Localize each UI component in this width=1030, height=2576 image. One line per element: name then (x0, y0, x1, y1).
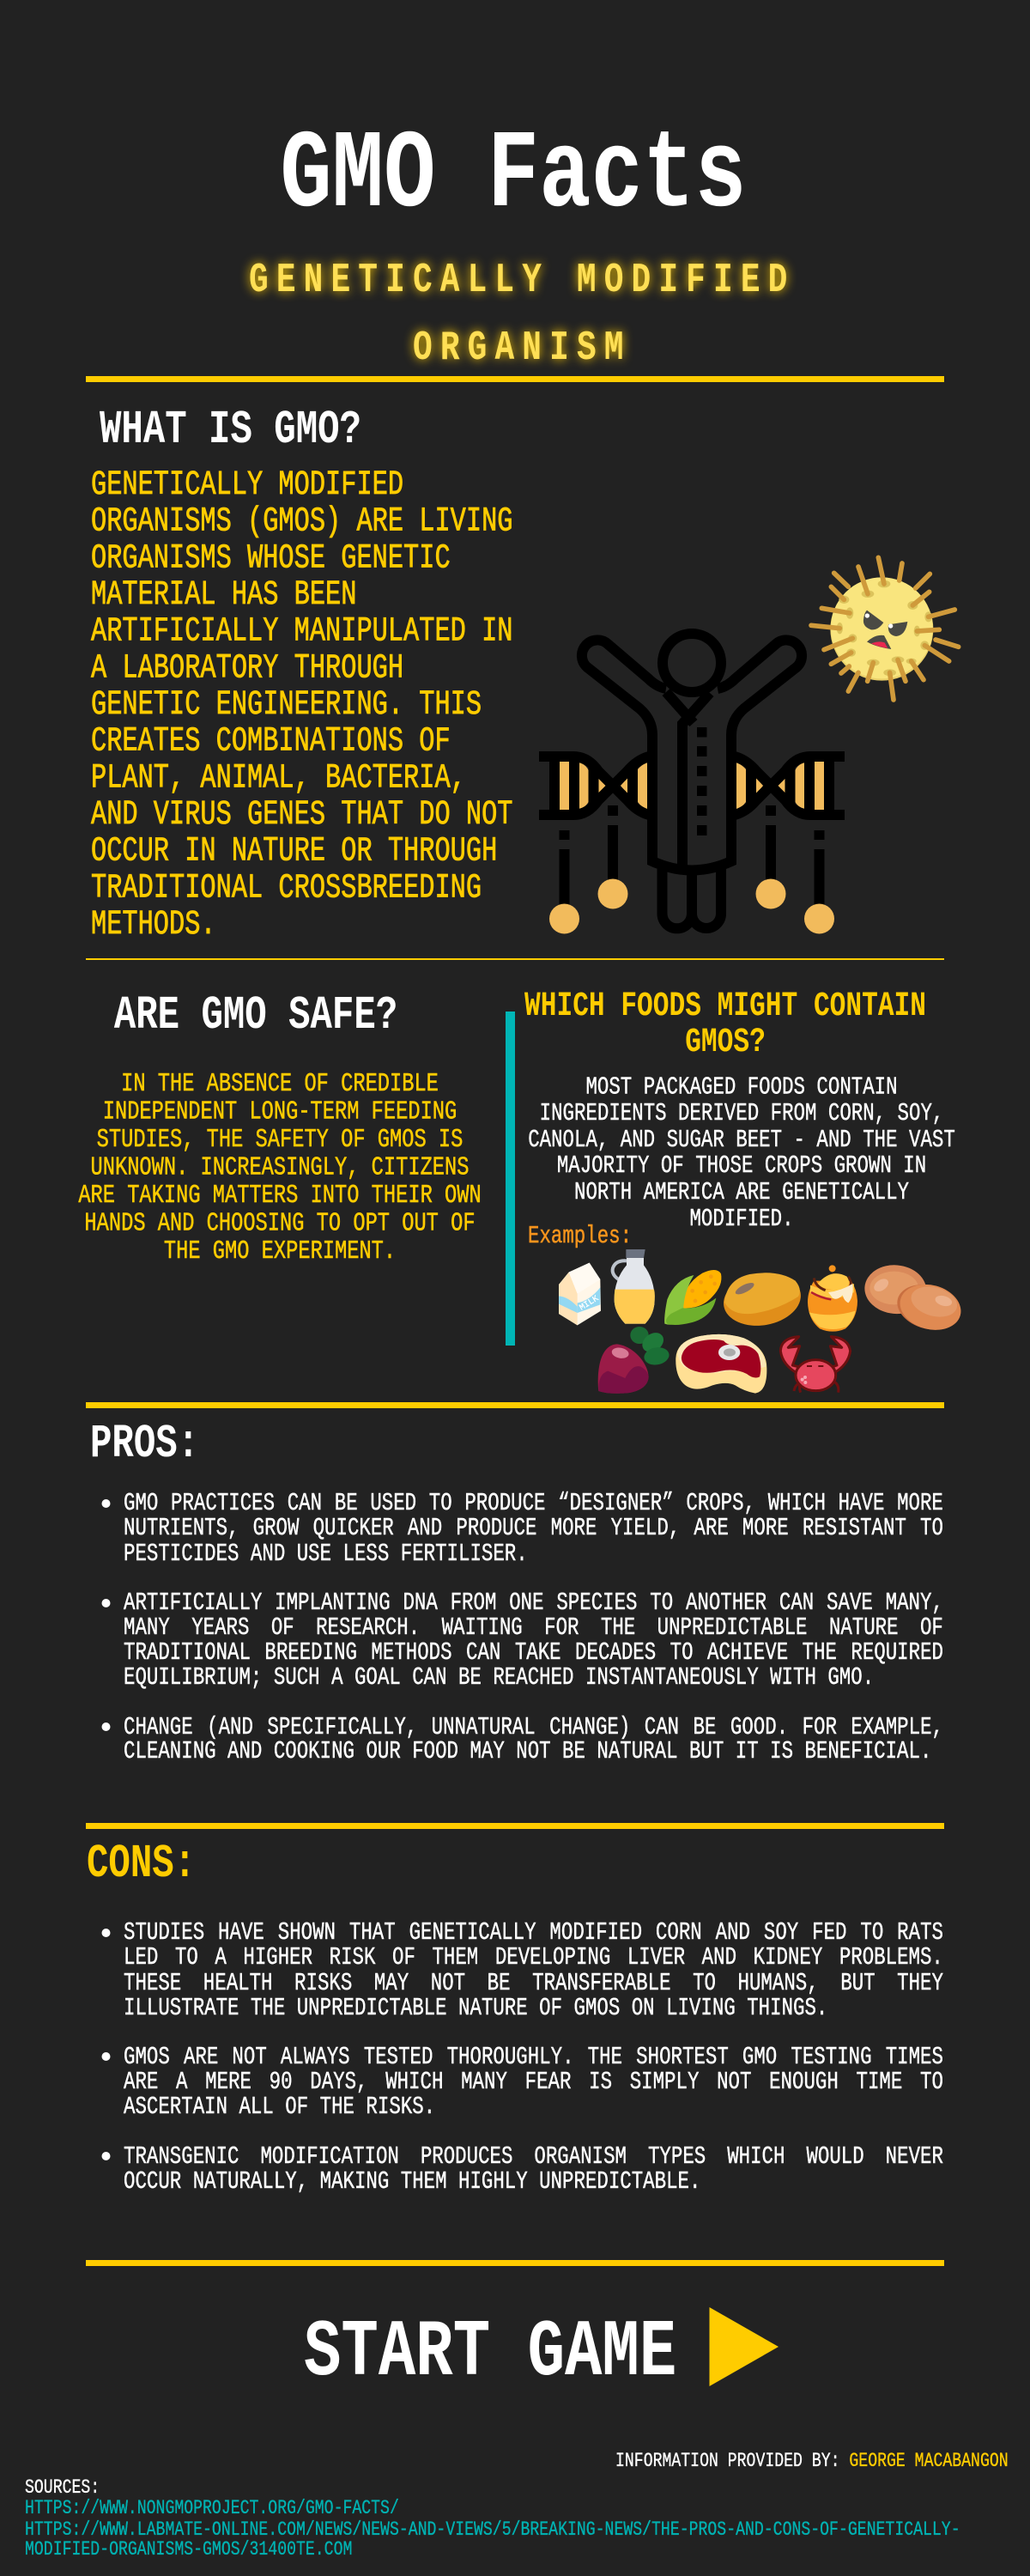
text block: packaged foods: MOST PACKAGED FOODS CONTAIN (585, 1073, 898, 1101)
icon: crab (780, 1337, 851, 1393)
text block: GMO definition: AND VIRUS GENES THAT DO NOT (91, 796, 512, 834)
title: GMO Facts (280, 113, 747, 239)
text block: safety: IN THE ABSENCE OF CREDIBLE (121, 1069, 439, 1099)
heading: pros: PROS: (90, 1417, 199, 1471)
list: cons (101, 1919, 943, 2196)
subtitle with glow: GENETICALLY MODIFIED (249, 258, 795, 305)
bullet 2 (101, 1589, 943, 1692)
text block: GMO definition (91, 466, 512, 944)
bullet 1: GMO PRACTICES CAN BE USED TO PRODUCE “DESIGNER” CROPS, WHICH HAVE MORE (124, 1490, 943, 1517)
text block: GMO definition: A LABORATORY THROUGH (91, 649, 403, 688)
text block: safety: STUDIES, THE SAFETY OF GMOS IS (97, 1125, 463, 1155)
bullet 1: ILLUSTRATE THE UNPREDICTABLE NATURE OF GMOS ON LIVING THINGS. (124, 1995, 827, 2022)
icon: angry virus (811, 557, 959, 700)
text block: GMO definition: ORGANISMS (GMOS) ARE LIVING (91, 502, 512, 541)
text block: safety: ARE TAKING MATTERS INTO THEIR OWN (78, 1181, 482, 1211)
text block: GMO definition: PLANT, ANIMAL, BACTERIA, (91, 759, 466, 798)
sources (25, 2477, 960, 2561)
text block: packaged foods (528, 1073, 955, 1233)
heading: what is GMO: WHAT IS GMO? (100, 403, 361, 457)
icon: steak (676, 1334, 766, 1394)
subtitle with glow: ORGANISM (413, 325, 632, 373)
bullet 2: ARE A MERE 90 DAYS, WHICH MANY FEAR IS SIMPLY NOT ENOUGH TIME TO (124, 2069, 943, 2096)
bullet 2: ASCERTAIN ALL OF THE RISKS. (124, 2093, 435, 2121)
heading: which foods: GMOS? (685, 1023, 766, 1061)
sources: SOURCES: (25, 2477, 100, 2500)
text block: GMO definition: GENETICALLY MODIFIED (91, 466, 403, 504)
icon: oil jug (613, 1249, 655, 1324)
icon: scientist with DNA (539, 634, 845, 934)
bullet 3: CHANGE (AND SPECIFICALLY, UNNATURAL CHANGE) CAN BE GOOD. FOR EXAMPLE, (124, 1714, 943, 1741)
text block: GMO definition: MATERIAL HAS BEEN (91, 576, 356, 614)
bullet 3 (101, 2143, 943, 2196)
icon: soy bean (719, 1267, 805, 1332)
text block: GMO definition: OCCUR IN NATURE OR THROUGH (91, 832, 497, 871)
bullet 3: TRANSGENIC MODIFICATION PRODUCES ORGANISM TYPES WHICH WOULD NEVER (124, 2143, 943, 2171)
food icons (559, 1249, 966, 1394)
text block: safety: HANDS AND CHOOSING TO OPT OUT OF (84, 1209, 476, 1239)
heading: cons: CONS: (87, 1837, 196, 1891)
bullet 1: NUTRIENTS, GROW QUICKER AND PRODUCE MORE YIELD, ARE MORE RESISTANT TO (124, 1515, 943, 1542)
text block: safety (78, 1069, 482, 1267)
sources: MODIFIED-ORGANISMS-GMOS/31400TE.COM (25, 2539, 352, 2561)
icon: honey pot (808, 1265, 857, 1332)
divider: above cons (86, 1823, 944, 1829)
text block: GMO definition: GENETIC ENGINEERING. THIS (91, 686, 482, 724)
bullet 1 (101, 1490, 943, 1568)
text block: packaged foods: MAJORITY OF THOSE CROPS GROWN IN (557, 1152, 926, 1180)
bullet 1: PESTICIDES AND USE LESS FERTILISER. (124, 1540, 528, 1568)
icon: beet (598, 1327, 670, 1394)
bullet 2 (101, 2044, 943, 2121)
bullet 1 (101, 1919, 943, 2022)
text block: GMO definition: CREATES COMBINATIONS OF (91, 722, 451, 761)
thin divider (86, 958, 944, 960)
button text: start game: START GAME (304, 2308, 676, 2399)
text block: packaged foods: INGREDIENTS DERIVED FROM CORN, SOY, (540, 1100, 943, 1127)
bullet 2: TRADITIONAL BREEDING METHODS CAN TAKE DECADES TO ACHIEVE THE REQUIRED (124, 1639, 943, 1667)
bullet 2: ARTIFICIALLY IMPLANTING DNA FROM ONE SPECIES TO ANOTHER CAN SAVE MANY, (124, 1589, 943, 1617)
bullet 2: GMOS ARE NOT ALWAYS TESTED THOROUGHLY. THE SHORTEST GMO TESTING TIMES (124, 2044, 943, 2071)
bullet 1: THESE HEALTH RISKS MAY NOT BE TRANSFERABLE TO HUMANS, BUT THEY (124, 1970, 943, 1997)
bullet 3: OCCUR NATURALLY, MAKING THEM HIGHLY UNPREDICTABLE. (124, 2168, 700, 2196)
bullet 3 (101, 1714, 943, 1765)
divider: above pros (86, 1402, 944, 1408)
bullet 3: CLEANING AND COOKING OUR FOOD MAY NOT BE NATURAL BUT IT IS BENEFICIAL. (124, 1738, 931, 1765)
teal vertical bar (506, 1012, 515, 1346)
subtitle with glow (249, 258, 795, 373)
text block: GMO definition: ARTIFICIALLY MANIPULATED IN (91, 612, 512, 651)
sources: HTTPS://WWW.NONGMOPROJECT.ORG/GMO-FACTS/ (25, 2498, 399, 2520)
bullet 1: LED TO A HIGHER RISK OF THEM DEVELOPING LIVER AND KIDNEY PROBLEMS. (124, 1944, 943, 1971)
icon: milk carton: MILK (578, 1294, 600, 1313)
text block: safety: THE GMO EXPERIMENT. (164, 1236, 396, 1267)
text block: safety: UNKNOWN. INCREASINGLY, CITIZENS (91, 1153, 469, 1183)
icon: play arrow (709, 2307, 779, 2386)
text block: GMO definition: METHODS. (91, 906, 216, 944)
icon: potatoes (863, 1262, 966, 1337)
heading: are GMO safe: ARE GMO SAFE? (114, 988, 397, 1042)
credit line: INFORMATION PROVIDED BY: GEORGE MACABANGON (615, 2451, 1009, 2473)
bullet 2: EQUILIBRIUM; SUCH A GOAL CAN BE REACHED INSTANTANEOUSLY WITH GMO. (124, 1664, 874, 1692)
heading: which foods (524, 987, 926, 1061)
text block: GMO definition: TRADITIONAL CROSSBREEDING (91, 869, 482, 908)
divider: below header (86, 376, 944, 382)
divider: above start game (86, 2260, 944, 2266)
icon: milk carton (559, 1263, 601, 1325)
sources: HTTPS://WWW.LABMATE-ONLINE.COM/NEWS/NEWS-AND-VIEWS/5/BREAKING-NEWS/THE-PROS-AND-CONS-OF-GENETICALLY- (25, 2519, 960, 2542)
bullet 2: MANY YEARS OF RESEARCH. WAITING FOR THE UNPREDICTABLE NATURE OF (124, 1614, 943, 1642)
text block: GMO definition: ORGANISMS WHOSE GENETIC (91, 539, 451, 578)
list: pros (101, 1490, 943, 1765)
text block: packaged foods: NORTH AMERICA ARE GENETICALLY (574, 1179, 909, 1206)
text block: packaged foods: CANOLA, AND SUGAR BEET - AND THE VAST (528, 1127, 955, 1154)
label: examples: Examples: (528, 1223, 632, 1250)
text block: packaged foods: MODIFIED. (689, 1206, 794, 1233)
icon: corn (664, 1270, 721, 1325)
bullet 1: STUDIES HAVE SHOWN THAT GENETICALLY MODIFIED CORN AND SOY FED TO RATS (124, 1919, 943, 1947)
heading: which foods: WHICH FOODS MIGHT CONTAIN (524, 987, 926, 1025)
text block: safety: INDEPENDENT LONG-TERM FEEDING (103, 1097, 457, 1127)
